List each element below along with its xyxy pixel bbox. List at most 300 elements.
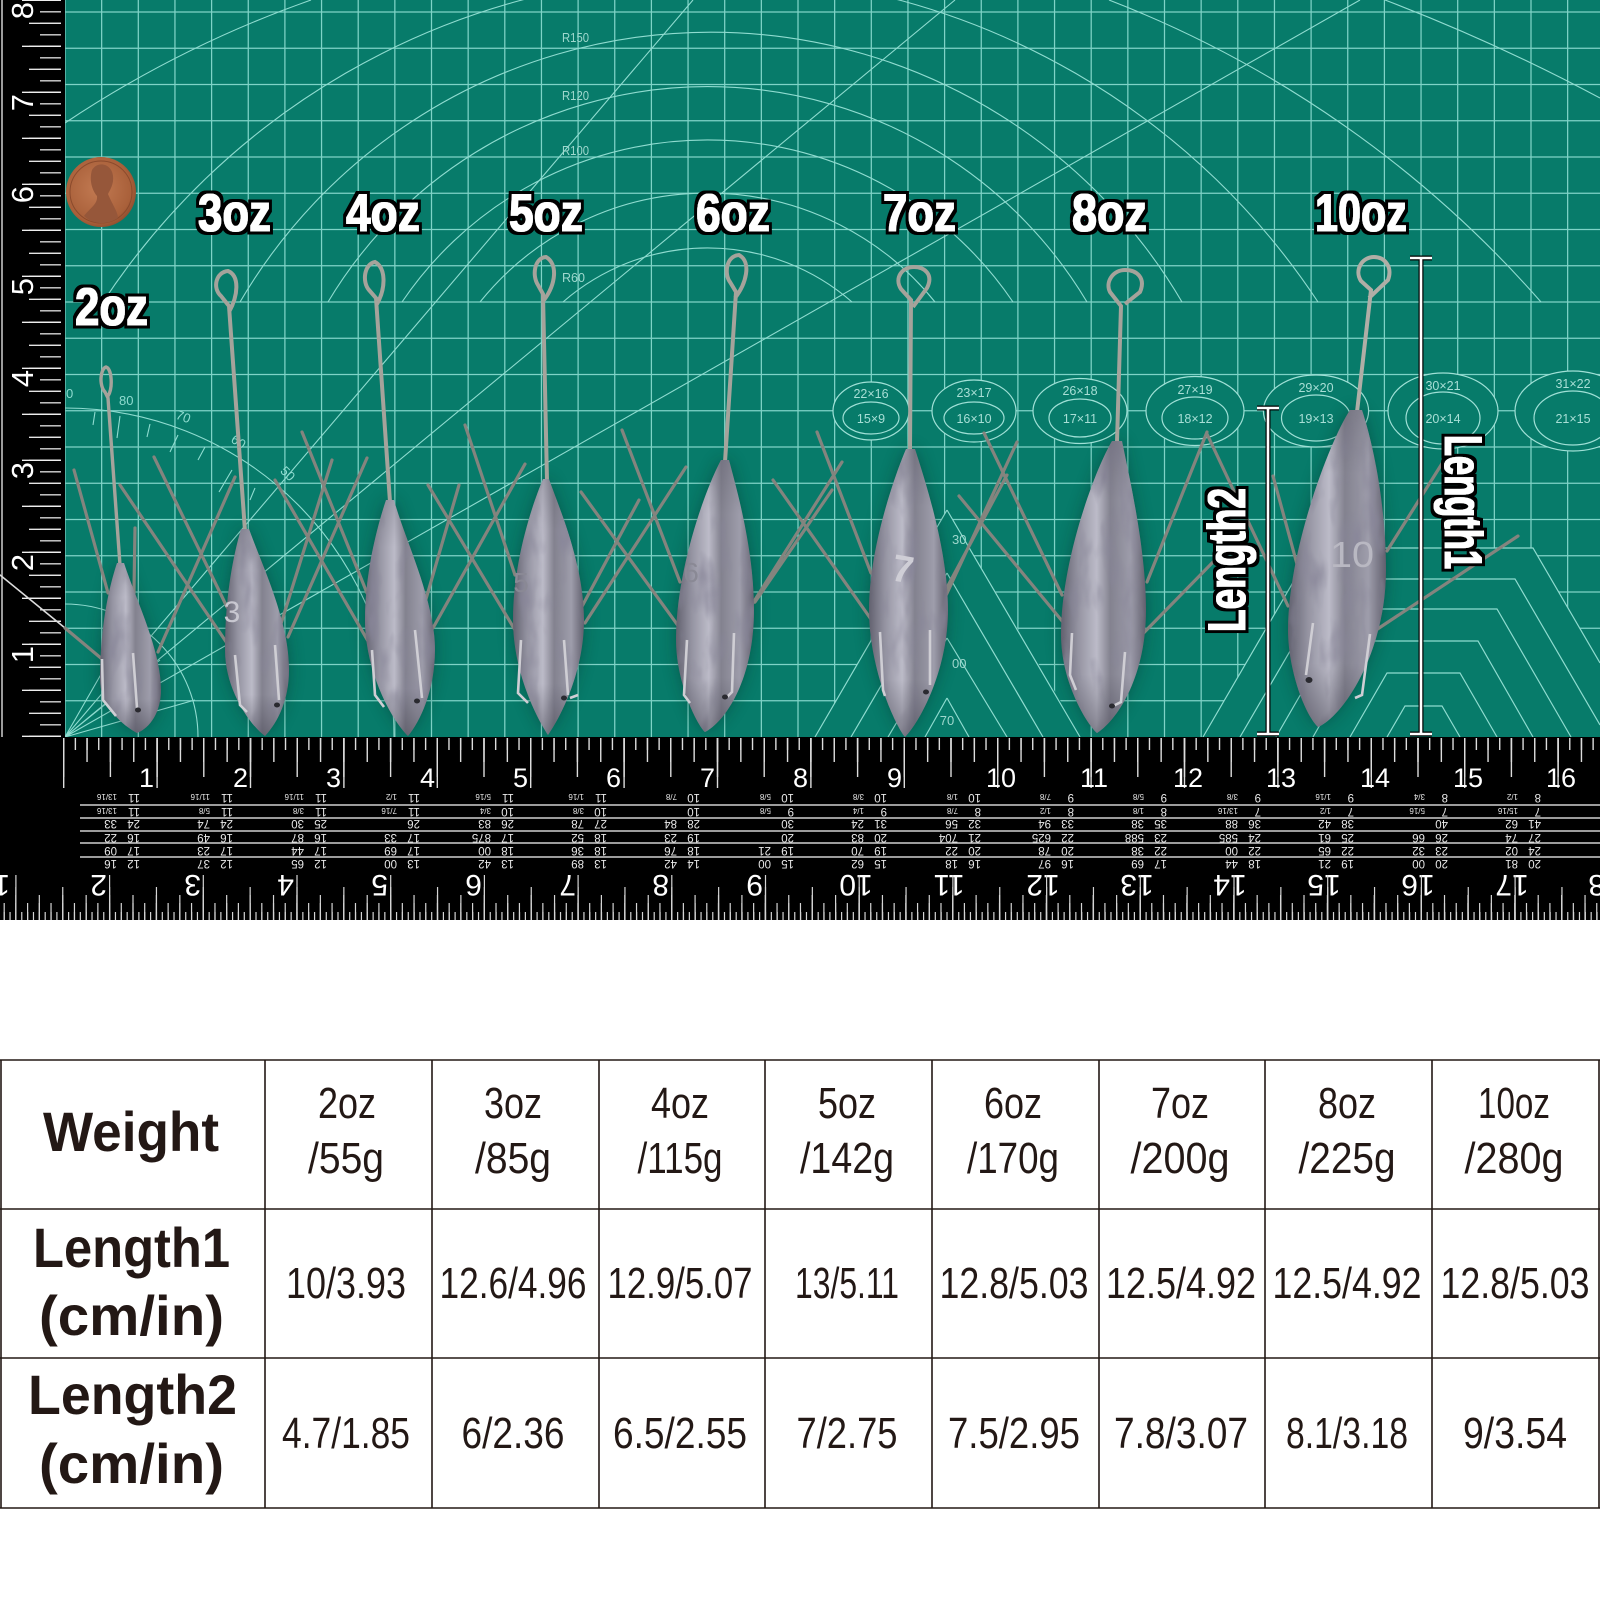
upside-down conversion table text: 7 bbox=[1535, 805, 1541, 817]
upside-down conversion table text: 81 bbox=[1505, 857, 1518, 869]
upside-down conversion table text: 40 bbox=[1435, 817, 1448, 829]
radius labels: R100 bbox=[562, 143, 589, 158]
left ruler numbers: 7 bbox=[5, 94, 40, 111]
weight labels: 3oz bbox=[198, 184, 271, 243]
radius labels: R120 bbox=[562, 88, 589, 103]
length2 row values: 9/3.54 bbox=[1463, 1409, 1567, 1458]
upside-down conversion table text: 15 bbox=[874, 857, 887, 869]
length2 row values: 7.5/2.95 bbox=[948, 1409, 1080, 1458]
upside-down conversion table text: 22 bbox=[945, 844, 958, 856]
upper ruler numbers bbox=[139, 763, 1576, 793]
size ellipse labels: 27×19 bbox=[1177, 383, 1213, 397]
weight labels: 8oz bbox=[1072, 184, 1147, 243]
left ruler numbers bbox=[5, 2, 40, 663]
upside-down conversion table text: 13/16 bbox=[96, 806, 117, 815]
upside-down conversion table text: 15 bbox=[781, 857, 794, 869]
upside-down conversion table text: 65 bbox=[291, 857, 304, 869]
size ellipse labels: 26×18 bbox=[1062, 384, 1098, 398]
weight row values: 7oz bbox=[1151, 1079, 1209, 1128]
upside-down conversion table text: 1/8 bbox=[946, 792, 958, 801]
upside-down conversion table text: 11 bbox=[128, 805, 140, 817]
upside-down conversion table text: 5/8 bbox=[759, 806, 771, 815]
upper ruler numbers: 14 bbox=[1360, 763, 1390, 793]
upside-down conversion table text: 83 bbox=[478, 817, 491, 829]
upper ruler numbers: 15 bbox=[1453, 763, 1483, 793]
upside-down conversion table text: 22 bbox=[1061, 831, 1074, 843]
row headers: (cm/in) bbox=[39, 1284, 224, 1347]
radius labels: R60 bbox=[562, 270, 585, 285]
upside-down ruler numbers: 7 bbox=[559, 868, 576, 901]
upside-down conversion table text: 38 bbox=[1131, 844, 1144, 856]
radius labels bbox=[562, 30, 589, 285]
upside-down conversion table text: 21 bbox=[1318, 857, 1331, 869]
upside-down ruler numbers: 11 bbox=[933, 868, 965, 901]
chevron triangles bottom centre: 30 bbox=[952, 532, 966, 547]
upside-down ruler numbers bbox=[0, 868, 1600, 901]
upside-down conversion table text: 18 bbox=[501, 844, 514, 856]
sinker 3oz: 3 bbox=[224, 596, 240, 629]
upside-down conversion table text: 16 bbox=[1061, 857, 1074, 869]
upside-down ruler numbers: 10 bbox=[839, 868, 873, 901]
row headers bbox=[28, 1100, 237, 1495]
upside-down conversion table text: 42 bbox=[1318, 817, 1331, 829]
weight row values: /280g bbox=[1464, 1134, 1564, 1183]
upside-down conversion table text: 94 bbox=[1038, 817, 1051, 829]
length1 row values: 12.6/4.96 bbox=[440, 1259, 586, 1308]
upside-down conversion table text: 10 bbox=[781, 791, 794, 803]
upside-down conversion table text: 3/4 bbox=[1413, 792, 1425, 801]
panel: green cutting mat bbox=[65, 0, 1600, 737]
upper ruler numbers: 12 bbox=[1173, 763, 1203, 793]
upside-down conversion table text: 26 bbox=[1435, 831, 1448, 843]
upside-down conversion table text: 17 bbox=[1154, 857, 1167, 869]
upside-down conversion table text: 14 bbox=[687, 857, 700, 869]
upside-down conversion table text: 13/16 bbox=[96, 792, 117, 801]
upside-down conversion table text: 9 bbox=[1348, 791, 1354, 803]
upside-down conversion table text: 12 bbox=[220, 857, 233, 869]
protractor numbers: 0 bbox=[66, 386, 73, 401]
upside-down conversion table text: 12 bbox=[127, 857, 140, 869]
upside-down ruler numbers: 8 bbox=[652, 868, 669, 901]
upside-down conversion table text: 20 bbox=[1061, 844, 1074, 856]
row headers: Weight bbox=[43, 1100, 219, 1163]
weight row values: 4oz bbox=[651, 1079, 709, 1128]
weight row values: /115g bbox=[638, 1134, 722, 1183]
upper ruler numbers: 6 bbox=[606, 763, 621, 793]
size ellipse labels: 18×12 bbox=[1177, 412, 1213, 426]
length1 row values bbox=[286, 1259, 1590, 1308]
upside-down conversion table text: 18 bbox=[1248, 857, 1261, 869]
weight labels: 2oz bbox=[75, 278, 148, 337]
upside-down conversion table text: 5/8 bbox=[198, 806, 210, 815]
weight labels: 4oz bbox=[346, 184, 420, 243]
upper ruler numbers: 3 bbox=[326, 763, 341, 793]
upside-down conversion table text: 20 bbox=[874, 831, 887, 843]
upside-down ruler numbers: 3 bbox=[184, 868, 201, 901]
upside-down conversion table text: 13 bbox=[594, 857, 607, 869]
upside-down conversion table text: 15/16 bbox=[1497, 806, 1518, 815]
upside-down conversion table text: 17 bbox=[220, 844, 233, 856]
upside-down conversion table text: 26 bbox=[407, 817, 420, 829]
protractor numbers: 80 bbox=[119, 393, 133, 408]
upside-down conversion table text: 16 bbox=[220, 831, 233, 843]
upside-down conversion table text: 13 bbox=[501, 857, 514, 869]
upside-down conversion table text: 10 bbox=[501, 805, 514, 817]
upside-down conversion table text: 625 bbox=[1032, 831, 1051, 843]
upside-down conversion table text: 76 bbox=[664, 844, 677, 856]
length1 row values: 12.8/5.03 bbox=[940, 1259, 1088, 1308]
upside-down conversion table text: 17 bbox=[127, 844, 140, 856]
upside-down conversion table text: 1/4 bbox=[852, 806, 864, 815]
upside-down conversion table text: 3/8 bbox=[852, 792, 864, 801]
upside-down conversion table text: 20 bbox=[1528, 857, 1541, 869]
weight row values: /225g bbox=[1298, 1134, 1396, 1183]
sinker 5oz bbox=[513, 257, 584, 735]
weight row values: /85g bbox=[475, 1134, 551, 1183]
left ruler numbers: 1 bbox=[5, 646, 40, 663]
upside-down ruler numbers: 5 bbox=[371, 868, 388, 901]
upside-down conversion table text: 00 bbox=[478, 844, 491, 856]
upside-down conversion table text: 7/8 bbox=[1039, 792, 1051, 801]
upside-down conversion table text: 7/8 bbox=[946, 806, 958, 815]
upside-down conversion table text: 9 bbox=[1068, 791, 1074, 803]
upper ruler numbers: 2 bbox=[233, 763, 248, 793]
sinker 7oz: 7 bbox=[889, 547, 917, 592]
upside-down conversion table text: 38 bbox=[1341, 817, 1354, 829]
upside-down conversion table text: 19 bbox=[874, 844, 887, 856]
upside-down conversion table text: 38 bbox=[1131, 817, 1144, 829]
protractor numbers: 70 bbox=[174, 407, 193, 426]
protractor numbers: 50 bbox=[277, 463, 298, 484]
length2 row values: 4.7/1.85 bbox=[282, 1409, 410, 1458]
upside-down conversion table text: 1/2 bbox=[1039, 806, 1051, 815]
size ellipse labels: 31×22 bbox=[1555, 377, 1591, 391]
upside-down conversion table text: 19 bbox=[1341, 857, 1354, 869]
upside-down conversion table text: 44 bbox=[1225, 857, 1238, 869]
upside-down conversion table text: 74 bbox=[197, 817, 210, 829]
weight row values: 2oz bbox=[318, 1079, 376, 1128]
length2 row values bbox=[282, 1409, 1567, 1458]
upside-down conversion table text: 20 bbox=[968, 844, 981, 856]
upside-down conversion table text: 88 bbox=[1225, 817, 1238, 829]
upside-down conversion table text: 61 bbox=[1318, 831, 1331, 843]
upside-down conversion table text: 11 bbox=[595, 791, 607, 803]
upside-down conversion table text: 23 bbox=[1154, 831, 1167, 843]
upside-down conversion table text: 33 bbox=[104, 817, 117, 829]
upside-down conversion table text: 69 bbox=[1131, 857, 1144, 869]
upside-down conversion table text: 00 bbox=[758, 857, 771, 869]
upside-down conversion table text: 1/2 bbox=[385, 792, 397, 801]
upside-down conversion table text: 1/2 bbox=[1319, 806, 1331, 815]
upside-down conversion table text: 25 bbox=[314, 817, 327, 829]
upside-down conversion table text: 65 bbox=[1318, 844, 1331, 856]
upside-down conversion table text: 7 bbox=[1442, 805, 1448, 817]
upside-down conversion table text: 8 bbox=[1535, 791, 1541, 803]
upside-down conversion table text: 16 bbox=[968, 857, 981, 869]
upside-down ruler numbers: 12 bbox=[1026, 868, 1060, 901]
upside-down conversion table text: 585 bbox=[1219, 831, 1238, 843]
upside-down conversion table text: 1/8 bbox=[1132, 806, 1144, 815]
upside-down conversion table text: 27 bbox=[1528, 831, 1541, 843]
upside-down conversion table text: 8 bbox=[1068, 805, 1074, 817]
upper ruler numbers: 8 bbox=[793, 763, 808, 793]
sinker 8oz bbox=[1061, 270, 1146, 733]
upside-down conversion table text: 89 bbox=[571, 857, 584, 869]
upside-down conversion table text: 23 bbox=[664, 831, 677, 843]
upside-down conversion table text: 19 bbox=[687, 831, 700, 843]
length1 row values: 13/5.11 bbox=[795, 1259, 899, 1308]
upside-down conversion table text: 10 bbox=[687, 791, 700, 803]
weight row values: 5oz bbox=[818, 1079, 876, 1128]
upside-down conversion table text: 32 bbox=[1412, 844, 1425, 856]
upside-down conversion table text: 83 bbox=[851, 831, 864, 843]
upside-down conversion table text: 28 bbox=[687, 817, 700, 829]
length1 dimension bar bbox=[1410, 258, 1432, 734]
upside-down conversion table text bbox=[96, 791, 1541, 869]
upside-down conversion table text: 1/16 bbox=[568, 792, 584, 801]
left ruler numbers: 6 bbox=[5, 186, 40, 203]
upside-down conversion table text: 7 bbox=[1255, 805, 1261, 817]
weight labels: 6oz bbox=[696, 184, 770, 243]
left ruler numbers: 4 bbox=[5, 370, 40, 387]
upside-down conversion table text: 22 bbox=[1341, 844, 1354, 856]
upper ruler numbers: 5 bbox=[513, 763, 528, 793]
left ruler numbers: 3 bbox=[5, 462, 40, 479]
upside-down conversion table text: 56 bbox=[945, 817, 958, 829]
table grid bbox=[0, 1060, 1600, 1508]
size ellipse labels: 23×17 bbox=[956, 386, 992, 400]
upside-down conversion table text: 875 bbox=[472, 831, 491, 843]
sinker 6oz bbox=[676, 255, 754, 732]
upper ruler numbers: 13 bbox=[1266, 763, 1296, 793]
row headers: Length2 bbox=[28, 1363, 237, 1426]
upside-down conversion table text: 20 bbox=[781, 831, 794, 843]
upside-down conversion table text: 11/16 bbox=[190, 792, 210, 801]
upside-down conversion table text: 11 bbox=[221, 805, 233, 817]
weight row values: 10oz bbox=[1478, 1079, 1550, 1128]
size ellipses bbox=[833, 371, 1600, 451]
length1 label: Length1 bbox=[1433, 435, 1492, 569]
length2 row values: 6.5/2.55 bbox=[613, 1409, 747, 1458]
row headers: (cm/in) bbox=[39, 1432, 224, 1495]
upside-down conversion table text: 18 bbox=[594, 844, 607, 856]
upside-down conversion table text: 42 bbox=[478, 857, 491, 869]
upside-down conversion table text: 24 bbox=[220, 817, 233, 829]
upside-down conversion table text: 87 bbox=[291, 831, 304, 843]
upside-down conversion table text: 18 bbox=[594, 831, 607, 843]
icon: penny bbox=[66, 157, 136, 227]
upside-down ruler numbers: 6 bbox=[465, 868, 482, 901]
upside-down conversion table text: 16 bbox=[314, 831, 327, 843]
upside-down conversion table text: 18 bbox=[687, 844, 700, 856]
upside-down conversion table text: 10 bbox=[874, 791, 887, 803]
upside-down conversion table text: 17 bbox=[407, 844, 420, 856]
upper ruler numbers: 9 bbox=[887, 763, 902, 793]
weight row values: 8oz bbox=[1318, 1079, 1376, 1128]
upside-down conversion table text: 11 bbox=[221, 791, 233, 803]
upside-down conversion table text: 00 bbox=[384, 857, 397, 869]
upside-down conversion table text: 37 bbox=[197, 857, 210, 869]
upside-down conversion table text: 24 bbox=[851, 817, 864, 829]
upside-down conversion table text: 62 bbox=[1505, 817, 1518, 829]
upper ruler numbers: 11 bbox=[1080, 763, 1108, 793]
upside-down conversion table text: 70 bbox=[851, 844, 864, 856]
upside-down conversion table text: 02 bbox=[1505, 844, 1518, 856]
upside-down conversion table text: 9 bbox=[881, 805, 887, 817]
upside-down conversion table text: 16 bbox=[104, 857, 117, 869]
upper ruler numbers: 7 bbox=[700, 763, 715, 793]
weight labels bbox=[75, 184, 1407, 337]
weight row values: /55g bbox=[308, 1134, 384, 1183]
left ruler numbers: 8 bbox=[5, 2, 40, 19]
upside-down ruler numbers: 14 bbox=[1213, 868, 1247, 901]
size ellipse labels: 19×13 bbox=[1298, 412, 1334, 426]
upside-down conversion table text: 13 bbox=[407, 857, 420, 869]
upper ruler numbers: 4 bbox=[420, 763, 435, 793]
size ellipse labels: 17×11 bbox=[1063, 412, 1097, 426]
upside-down conversion table text: 3/8 bbox=[1226, 792, 1238, 801]
upside-down conversion table text: 7/8 bbox=[665, 792, 677, 801]
upside-down conversion table text: 09 bbox=[104, 844, 117, 856]
upper ruler numbers: 16 bbox=[1546, 763, 1576, 793]
protractor numbers bbox=[66, 386, 298, 484]
upside-down conversion table text: 11 bbox=[128, 791, 140, 803]
upside-down conversion table text: 17 bbox=[314, 844, 327, 856]
upside-down conversion table text: 23 bbox=[197, 844, 210, 856]
weight row values: /200g bbox=[1130, 1134, 1230, 1183]
upside-down conversion table text: 22 bbox=[1154, 844, 1167, 856]
upside-down conversion table text: 31 bbox=[874, 817, 887, 829]
upside-down conversion table text: 10 bbox=[687, 805, 700, 817]
length2 label: Length2 bbox=[1198, 488, 1257, 632]
upside-down conversion table text: 62 bbox=[851, 857, 864, 869]
upside-down conversion table text: 7 bbox=[1348, 805, 1354, 817]
radius labels: R150 bbox=[562, 30, 589, 45]
upside-down conversion table text: 30 bbox=[291, 817, 304, 829]
upside-down conversion table text: 66 bbox=[1412, 831, 1425, 843]
upside-down conversion table text: 17 bbox=[407, 831, 420, 843]
upside-down conversion table text: 36 bbox=[1248, 817, 1261, 829]
length2 row values: 6/2.36 bbox=[462, 1409, 564, 1458]
left ruler bbox=[0, 0, 65, 785]
upside-down conversion table text: 11 bbox=[408, 805, 420, 817]
upside-down conversion table text: 44 bbox=[291, 844, 304, 856]
upside-down conversion table text: 97 bbox=[1038, 857, 1051, 869]
upside-down ruler numbers: 17 bbox=[1495, 868, 1529, 901]
upside-down conversion table text: 5/16 bbox=[475, 792, 491, 801]
upside-down conversion table text: 49 bbox=[197, 831, 210, 843]
upside-down conversion table text: 5/8 bbox=[1132, 792, 1144, 801]
sinker 5oz: 5 bbox=[513, 567, 529, 598]
upside-down conversion table text: 69 bbox=[384, 844, 397, 856]
upside-down conversion table text: 24 bbox=[127, 817, 140, 829]
chevron triangles bottom centre: 00 bbox=[952, 656, 966, 671]
upside-down conversion table text: 74 bbox=[1505, 831, 1518, 843]
upside-down conversion table text: 21 bbox=[758, 844, 771, 856]
size ellipse labels: 20×14 bbox=[1425, 412, 1461, 426]
sinker 7oz bbox=[869, 267, 948, 737]
conversion table lines bbox=[80, 805, 1600, 857]
upside-down conversion table text: 32 bbox=[968, 817, 981, 829]
upside-down conversion table text: 33 bbox=[1061, 817, 1074, 829]
weight row values: /142g bbox=[800, 1134, 894, 1183]
upside-down conversion table text: 00 bbox=[1225, 844, 1238, 856]
chevron trapezoids bottom right bbox=[1203, 548, 1600, 737]
length2 row values: 8.1/3.18 bbox=[1286, 1409, 1408, 1458]
upside-down conversion table text: 24 bbox=[1248, 831, 1261, 843]
specification table bbox=[0, 1060, 1600, 1508]
upside-down conversion table text: 18 bbox=[945, 857, 958, 869]
upside-down ruler numbers: 16 bbox=[1401, 868, 1435, 901]
length2 dimension bar bbox=[1257, 408, 1279, 734]
upper ruler numbers: 10 bbox=[986, 763, 1016, 793]
upside-down conversion table text: 8 bbox=[1442, 791, 1448, 803]
upside-down conversion table text: 1/16 bbox=[1315, 792, 1331, 801]
upside-down ruler numbers: 13 bbox=[1120, 868, 1154, 901]
radius arcs bbox=[65, 0, 1600, 737]
size ellipse labels: 16×10 bbox=[956, 412, 992, 426]
upside-down conversion table text: 26 bbox=[501, 817, 514, 829]
upside-down conversion table text: 78 bbox=[1038, 844, 1051, 856]
upside-down conversion table text: 22 bbox=[1248, 844, 1261, 856]
sinker 6oz: 6 bbox=[683, 557, 699, 588]
upside-down conversion table text: 36 bbox=[571, 844, 584, 856]
upper inch ticks bbox=[63, 744, 1600, 763]
length1 row values: 12.9/5.07 bbox=[608, 1259, 752, 1308]
size ellipse labels: 21×15 bbox=[1555, 412, 1591, 426]
row headers: Length1 bbox=[33, 1216, 230, 1279]
weight labels: 5oz bbox=[509, 184, 583, 243]
weight row values bbox=[308, 1079, 1564, 1183]
size ellipse labels: 22×16 bbox=[853, 387, 889, 401]
upside-down conversion table text: 8 bbox=[975, 805, 981, 817]
upside-down conversion table text: 5/16 bbox=[1409, 806, 1425, 815]
upside-down conversion table text: 3/4 bbox=[479, 806, 491, 815]
upside-down conversion table text: 23 bbox=[1435, 844, 1448, 856]
weight labels: 10oz bbox=[1315, 184, 1407, 243]
upside-down conversion table text: 20 bbox=[1435, 857, 1448, 869]
upside-down conversion table text: 10 bbox=[968, 791, 981, 803]
upside-down conversion table text: 16 bbox=[127, 831, 140, 843]
upside-down conversion table text: 27 bbox=[594, 817, 607, 829]
weight labels: 7oz bbox=[883, 184, 956, 243]
upside-down conversion table text: 9 bbox=[788, 805, 794, 817]
left ruler numbers: 5 bbox=[5, 278, 40, 295]
chevron triangles bottom centre bbox=[815, 510, 1082, 737]
protractor numbers: 60 bbox=[228, 432, 249, 452]
lower inch ticks bbox=[4, 898, 1600, 916]
length1 row values: 10/3.93 bbox=[286, 1259, 406, 1308]
sinker 10oz: 10 bbox=[1330, 534, 1374, 575]
upside-down conversion table text: 3/8 bbox=[572, 806, 584, 815]
upside-down conversion table text: 9 bbox=[1255, 791, 1261, 803]
upside-down conversion table text: 7/16 bbox=[381, 806, 397, 815]
left ruler numbers: 2 bbox=[5, 554, 40, 571]
upside-down conversion table text: 11 bbox=[315, 805, 327, 817]
side wires bbox=[0, 425, 1518, 659]
upside-down conversion table text: 1/2 bbox=[1506, 792, 1518, 801]
upside-down conversion table text: 17 bbox=[501, 831, 514, 843]
upside-down ruler numbers: 2 bbox=[90, 868, 107, 901]
upside-down conversion table text: 13/16 bbox=[1217, 806, 1238, 815]
upside-down conversion table text: 11/16 bbox=[284, 792, 304, 801]
upside-down conversion table text: 52 bbox=[571, 831, 584, 843]
upside-down conversion table text: 42 bbox=[664, 857, 677, 869]
sinker 10oz bbox=[1288, 257, 1389, 727]
sinker 4oz bbox=[365, 262, 435, 736]
upside-down ruler numbers: 4 bbox=[277, 868, 294, 901]
upside-down conversion table text: 41 bbox=[1528, 817, 1541, 829]
